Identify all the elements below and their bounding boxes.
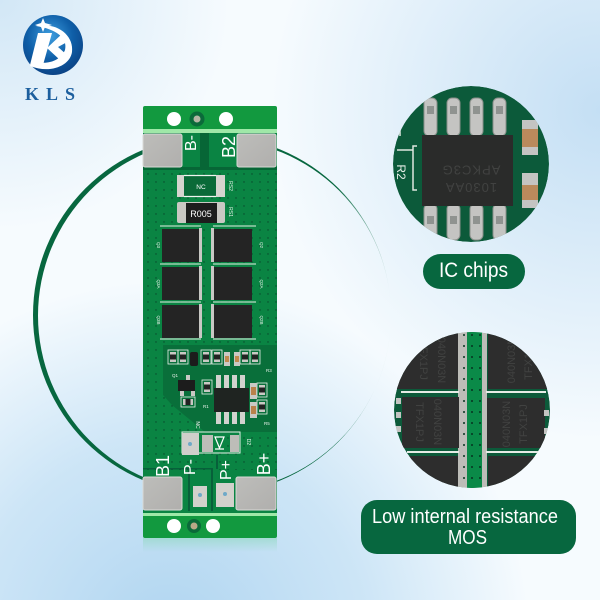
dark trace near top pads <box>143 133 277 170</box>
label B2: B2 <box>219 136 239 158</box>
board body <box>143 133 277 513</box>
chip body <box>422 135 513 206</box>
label B-: B- <box>183 135 200 151</box>
silk labels: R3 <box>266 368 272 373</box>
silk outlines <box>397 130 417 191</box>
green strip with vias <box>458 330 487 490</box>
MOS markings: 040N03N <box>501 401 513 447</box>
silk labels: R5 <box>264 421 270 426</box>
Low internal resistance MOS pill <box>361 500 576 554</box>
MOSFET array <box>156 226 264 339</box>
silk labels: R1 <box>203 404 209 409</box>
chip pins <box>424 98 506 240</box>
transistor <box>178 375 195 396</box>
label P+: P+ <box>218 460 235 480</box>
diode block: D2 <box>245 439 251 445</box>
dark copper zone around circuit <box>163 345 277 432</box>
circular arc behind board <box>33 136 391 494</box>
dark traces near bottom pads <box>143 455 218 511</box>
R005 resistor: R005 <box>190 209 212 219</box>
R005 resistor: RS1 <box>227 207 233 217</box>
MOS markings: 040N03N <box>435 337 447 383</box>
MOS packages <box>394 330 550 490</box>
silk labels: Q1 <box>172 373 179 378</box>
small resistors row <box>168 350 260 364</box>
IC chips pill <box>423 254 525 289</box>
KLS logo: L <box>46 84 58 104</box>
MOS markings: TFX1PJ <box>417 340 429 380</box>
Low internal resistance MOS pill: Low internal resistance <box>372 506 558 528</box>
zoom circle: MOS <box>394 330 550 490</box>
MOSFET array: Q2 <box>259 242 264 248</box>
IC chips pill: IC chips <box>439 259 508 282</box>
tan capacitors <box>250 383 257 418</box>
R2 label: R2 <box>394 164 408 180</box>
MOS markings: 040N03N <box>431 399 443 445</box>
bottom tab <box>143 513 277 538</box>
silk labels <box>172 368 272 426</box>
MOSFET array: Q2B <box>259 315 264 325</box>
MOSFET array: Q2A <box>259 279 264 289</box>
MOS markings <box>413 337 535 447</box>
bottom pads <box>143 477 276 510</box>
Low internal resistance MOS pill: MOS <box>448 527 487 549</box>
KLS logo: K <box>25 84 39 104</box>
IC U1 <box>214 375 249 424</box>
diode block: NC <box>194 421 200 429</box>
control circuit <box>168 350 272 426</box>
MOSFET array: Q3A <box>156 279 161 289</box>
MOS markings: TFX1PJ <box>413 402 425 442</box>
MOSFET array: Q3B <box>156 315 161 325</box>
PCB board <box>143 106 277 552</box>
pin shading <box>427 106 503 224</box>
NC resistor: NC <box>196 184 206 191</box>
white silk lines <box>401 392 546 452</box>
label B1: B1 <box>153 455 173 477</box>
chip body: APKC3G <box>442 162 500 178</box>
diode D1 <box>190 352 198 366</box>
label B+: B+ <box>254 453 274 475</box>
capacitor column <box>522 120 538 208</box>
capacitors <box>224 352 240 366</box>
chip body: 1030AA <box>445 180 497 195</box>
NC resistor <box>177 175 233 197</box>
NC resistor: RS2 <box>227 181 233 191</box>
MOSFET array: Q3 <box>156 242 161 248</box>
via dots <box>143 170 277 470</box>
MOS markings: TFX1PJ <box>523 340 535 380</box>
side pads <box>396 398 549 434</box>
diode block <box>182 421 251 455</box>
R005 resistor <box>177 202 233 223</box>
KLS logo <box>23 15 83 104</box>
resistors R1 R2 R3 R5 <box>181 380 267 414</box>
reflection under board <box>143 538 277 552</box>
top tab <box>143 106 277 133</box>
MOS markings: TFX1PJ <box>518 404 530 444</box>
zoom circle: IC chip <box>393 86 549 242</box>
label P-: P- <box>182 459 199 475</box>
KLS logo: S <box>65 84 75 104</box>
top pads <box>143 134 276 167</box>
MOS markings: 040N03N <box>506 337 518 383</box>
